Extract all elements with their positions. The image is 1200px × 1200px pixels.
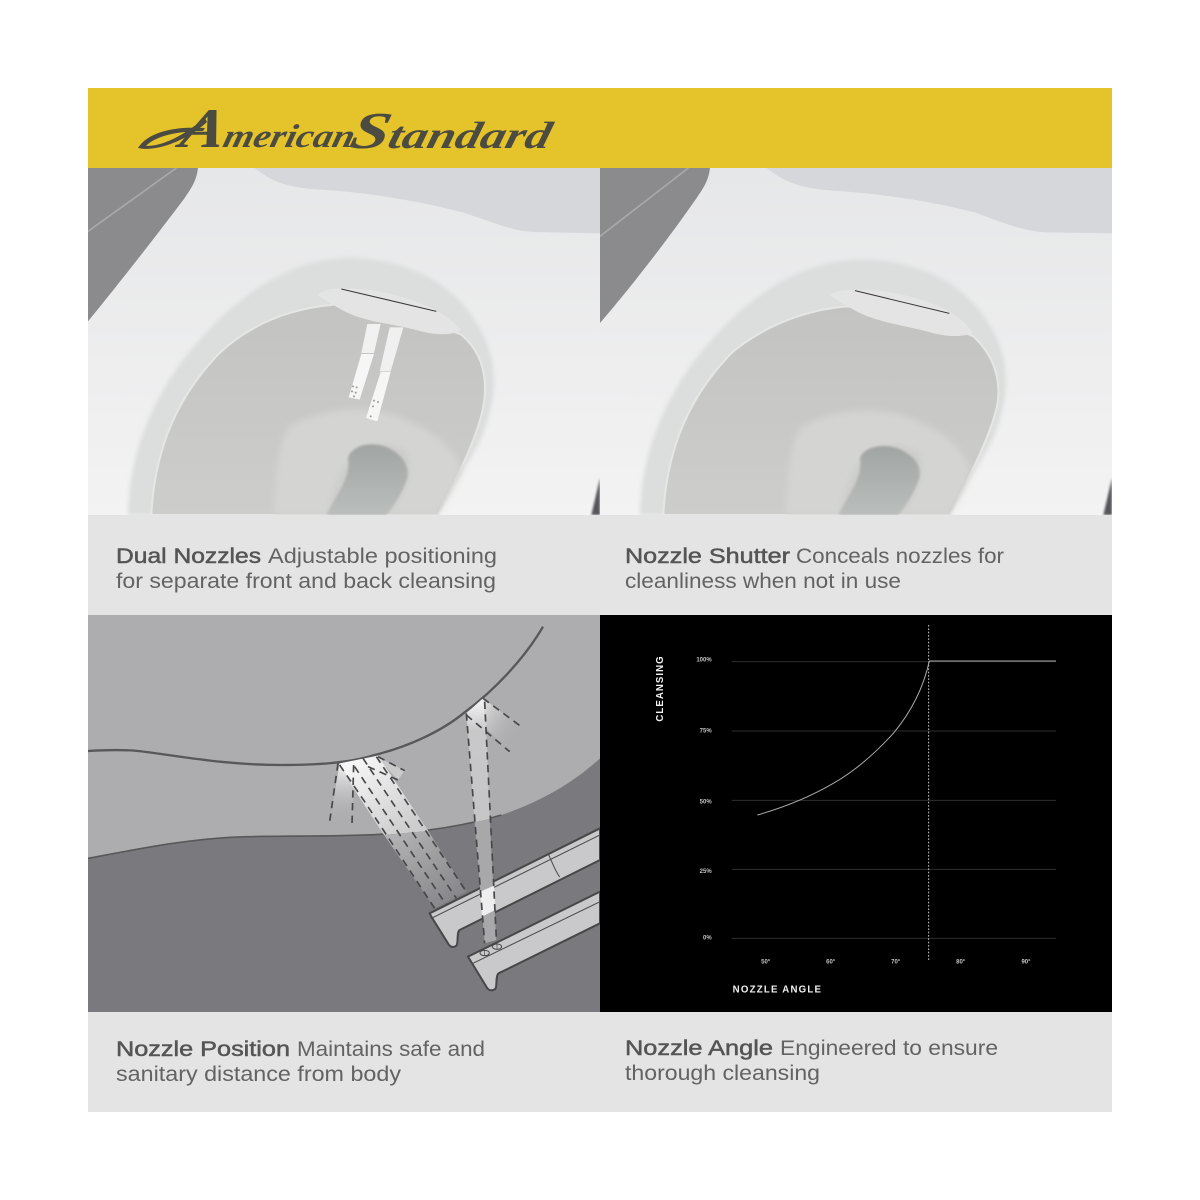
- y axis labels: 75%: [700, 729, 712, 735]
- logo: American Standard: [138, 98, 560, 160]
- caption strip top row: [88, 515, 1112, 616]
- chart: cleansing vs nozzle angle: [600, 615, 1112, 1012]
- nozzle shutter housing: [334, 306, 454, 334]
- caption: Nozzle Angle: Nozzle Angle: [625, 1037, 773, 1060]
- caption: Nozzle Angle: Engineered to ensure: [780, 1037, 998, 1060]
- logo: American Standard: Standard: [345, 103, 560, 160]
- closed shutter: [850, 308, 967, 336]
- curve: [757, 661, 1056, 815]
- caption: Nozzle Position: Maintains safe and: [297, 1038, 485, 1061]
- header band: [88, 88, 1112, 168]
- caption: Nozzle Shutter: [625, 545, 1004, 593]
- caption: Nozzle Angle: [625, 1037, 998, 1085]
- caption: Dual Nozzles: for separate front and back cleansing: [116, 570, 496, 593]
- caption: Nozzle Shutter: Conceals nozzles for: [796, 545, 1004, 568]
- x axis labels: [761, 959, 1031, 965]
- x axis labels: 80°: [956, 959, 966, 965]
- caption strip bottom row: [88, 1012, 1112, 1112]
- caption: Nozzle Position: [116, 1038, 485, 1086]
- y axis labels: 50%: [700, 800, 712, 806]
- caption: Dual Nozzles: Adjustable positioning: [268, 545, 497, 568]
- body curves: [88, 758, 600, 1012]
- dotted 75 degree marker: [927, 625, 930, 960]
- spray beam 2: [466, 698, 521, 943]
- caption: Nozzle Position: Nozzle Position: [116, 1038, 290, 1061]
- caption: Nozzle Shutter: Nozzle Shutter: [625, 545, 790, 568]
- photo: nozzle shutter closed: [600, 168, 1112, 515]
- y axis labels: 25%: [700, 869, 712, 875]
- y axis labels: 0%: [703, 935, 712, 941]
- y axis title: CLEANSING: [655, 656, 666, 722]
- gridlines: [732, 662, 1056, 938]
- x axis labels: 50°: [761, 959, 771, 965]
- nozzle rod rear: [430, 828, 600, 947]
- x axis labels: 60°: [826, 959, 836, 965]
- x axis labels: 90°: [1021, 959, 1031, 965]
- nozzles: [349, 324, 403, 421]
- caption: Dual Nozzles: [116, 545, 497, 593]
- spray beam 1: [330, 756, 466, 908]
- caption: Nozzle Angle: thorough cleansing: [625, 1062, 820, 1085]
- y axis labels: 100%: [696, 658, 712, 664]
- caption: Nozzle Position: sanitary distance from body: [116, 1063, 402, 1086]
- caption: Nozzle Shutter: cleanliness when not in use: [625, 570, 901, 593]
- diagram: nozzle position: [88, 615, 600, 1012]
- x axis title: NOZZLE ANGLE: [733, 985, 822, 996]
- nozzle rod front: [468, 892, 600, 990]
- caption: Dual Nozzles: Dual Nozzles: [116, 545, 261, 568]
- y axis labels: [696, 658, 712, 941]
- photo: dual nozzles extended: [88, 168, 600, 515]
- x axis labels: 70°: [891, 959, 901, 965]
- logo: American Standard: American: [171, 98, 364, 160]
